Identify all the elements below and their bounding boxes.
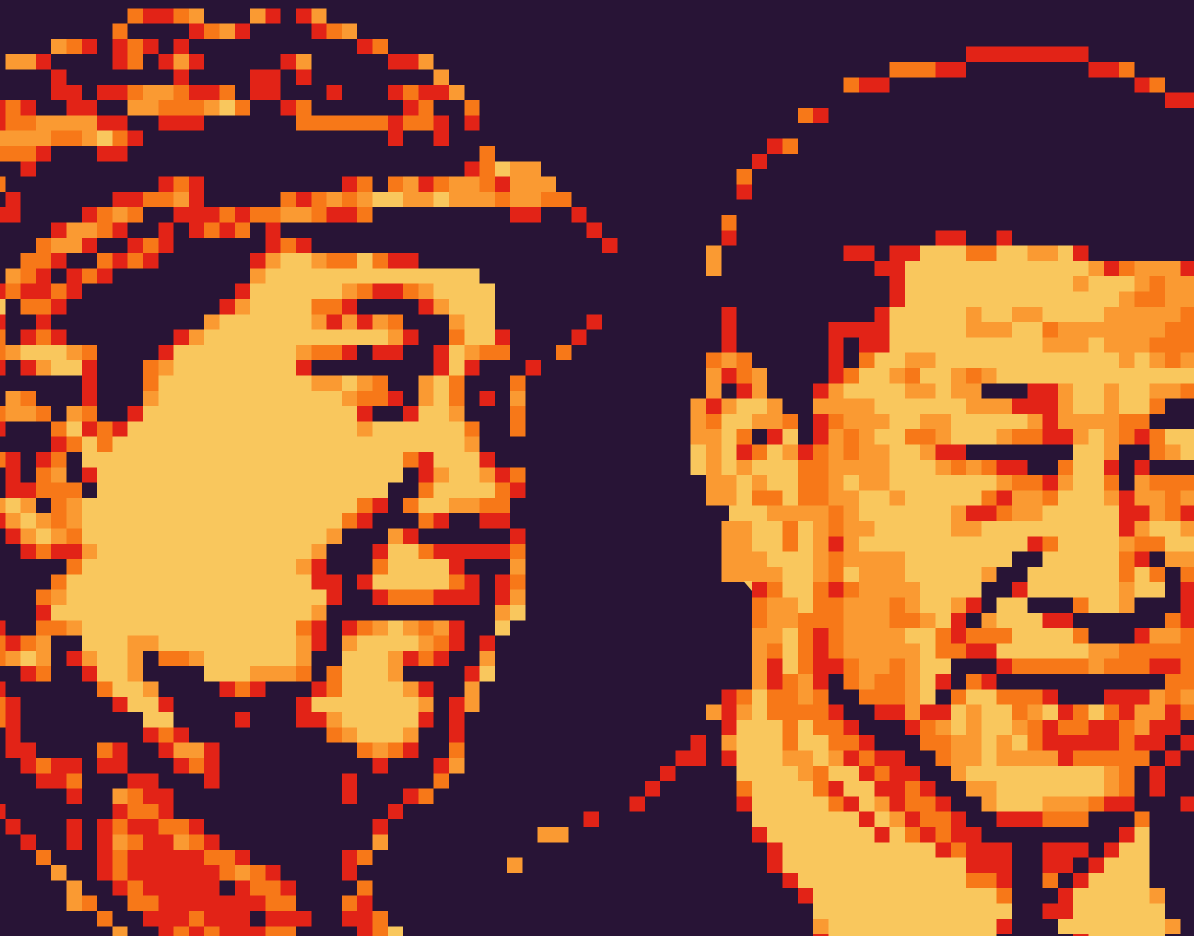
left figure: yellow face and hand [0,108,526,934]
portrait: right figure face [691,238,1194,936]
portrait: left figure [0,16,617,934]
dotted trail below right figure [507,743,706,865]
right figure: red pixels [706,238,1194,936]
halo arc around right figure [706,54,1194,269]
collar corner sliver [744,581,752,591]
right figure: orange pixels [706,253,1194,896]
left figure: red pixels [0,16,617,934]
left figure: amber pixels [0,16,556,934]
right figure: yellow face [691,253,1194,936]
right figure: amber pixels [691,253,1194,926]
left figure: orange pixels [0,16,571,934]
